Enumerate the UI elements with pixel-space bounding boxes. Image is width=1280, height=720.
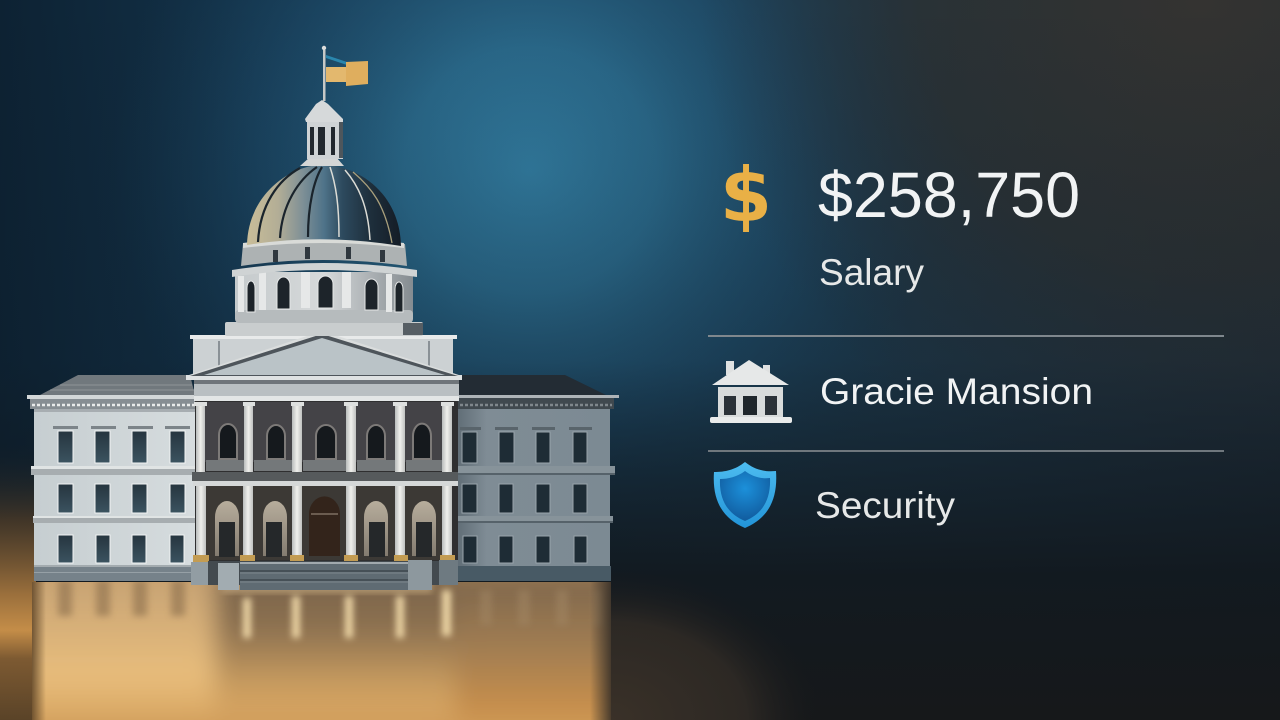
dome cupola [247, 165, 401, 246]
portico [186, 331, 462, 565]
dome drum [225, 238, 423, 336]
steps and pedestals [191, 560, 458, 590]
mansion label: Gracie Mansion [820, 371, 1093, 412]
icon: dollar sign: $ [720, 151, 772, 239]
security label: Security [815, 485, 956, 526]
golden floor reflection [32, 582, 611, 720]
icon: mansion [710, 360, 792, 423]
building [27, 46, 619, 590]
left wing [27, 375, 195, 581]
flag [322, 46, 368, 101]
pediment [186, 331, 462, 376]
salary label: Salary [819, 252, 924, 293]
right wing [456, 375, 619, 581]
lantern [300, 100, 344, 166]
salary amount: $258,750 [818, 159, 1080, 231]
icon: shield [714, 462, 776, 528]
panel: benefits list [708, 151, 1224, 528]
upper block behind pediment [190, 335, 457, 378]
entablature [194, 378, 459, 401]
